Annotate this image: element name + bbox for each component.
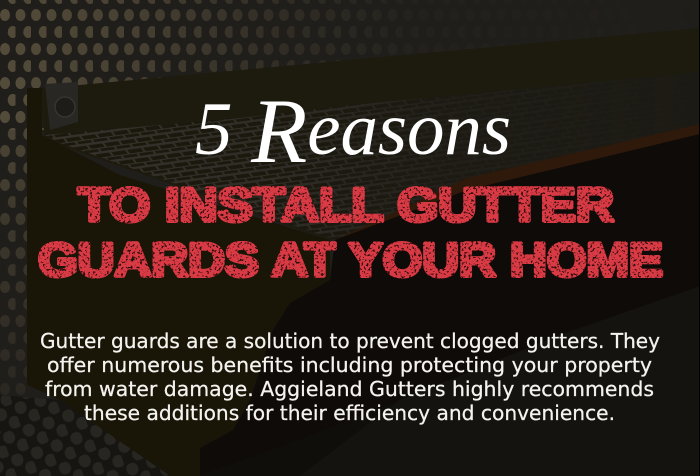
mesh tray xyxy=(45,72,700,240)
gutter back wall xyxy=(40,28,700,240)
heading: to install gutter guards at your home: GUARDS AT YOUR HOME xyxy=(38,233,663,286)
title: 5 Reasons: easons xyxy=(307,88,511,171)
title: 5 Reasons: 5 xyxy=(195,88,232,171)
dark gutter interior xyxy=(200,134,700,476)
intro paragraph: offer numerous benefits including protecting your property xyxy=(47,353,652,377)
intro paragraph: Gutter guards are a solution to prevent clogged gutters. They xyxy=(40,329,660,353)
gutter front face xyxy=(27,88,330,476)
intro paragraph: from water damage. Aggieland Gutters highly recommends xyxy=(45,377,654,401)
title: 5 Reasons: R xyxy=(250,80,307,182)
intro paragraph: these additions for their efficiency and convenience. xyxy=(84,401,615,425)
orange lip xyxy=(335,124,700,240)
title: 5 Reasons xyxy=(195,80,511,182)
lower left perforation xyxy=(0,395,170,476)
heading: to install gutter guards at your home xyxy=(38,178,663,286)
heading: to install gutter guards at your home: TO INSTALL GUTTER xyxy=(78,178,614,231)
bracket xyxy=(45,82,78,130)
intro paragraph xyxy=(40,329,660,425)
lower right band xyxy=(300,286,700,476)
